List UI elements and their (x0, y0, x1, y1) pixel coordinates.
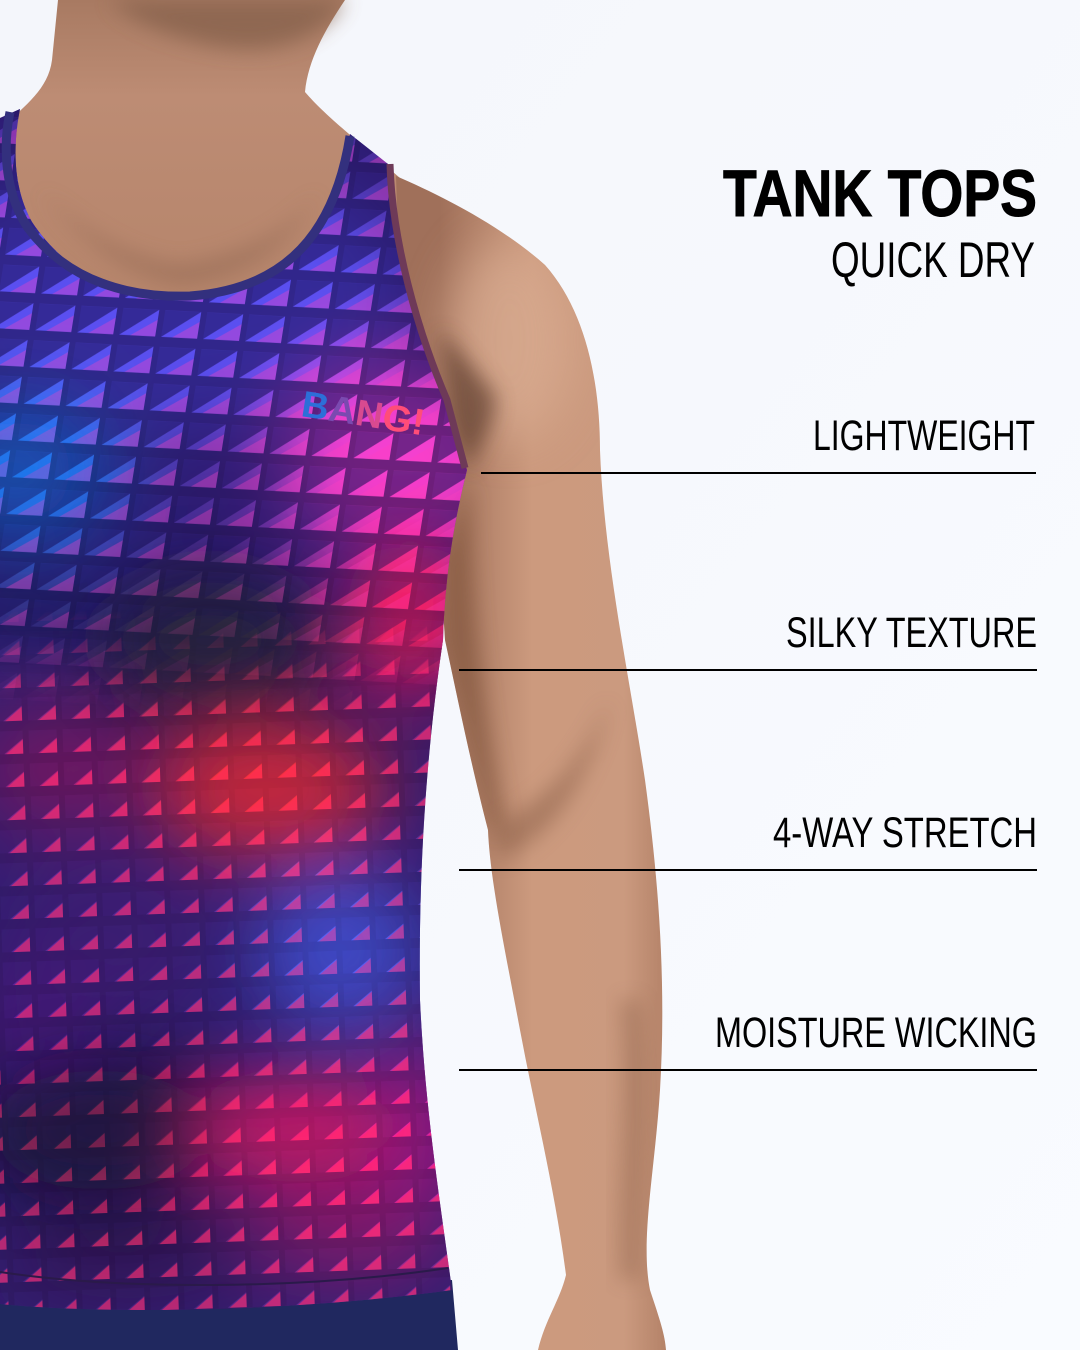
soft glow over pattern (0, 420, 450, 1190)
fabric base colour (0, 100, 480, 1330)
photo: model wearing tank top (0, 0, 680, 1350)
elbow muscle shadow (488, 727, 603, 860)
chest shadow (40, 190, 320, 285)
tank top garment (0, 109, 467, 1310)
armhole binding (390, 164, 465, 468)
forearm shadow (619, 1000, 644, 1280)
hem stitch (0, 1268, 448, 1285)
tile pattern lower (0, 617, 452, 1310)
brand logo: BANG! (299, 383, 428, 443)
gradient glow fields (0, 150, 520, 1300)
underarm shadow (440, 330, 495, 470)
inner arm shadow (443, 480, 505, 830)
tile pattern upper (0, 100, 480, 720)
neck and chest skin (0, 0, 400, 320)
neckline binding (6, 112, 350, 296)
arm and shoulder skin (390, 170, 680, 1350)
jaw shadow (110, 0, 345, 49)
shoulder highlight (448, 240, 572, 440)
shorts waistband (0, 1280, 458, 1350)
